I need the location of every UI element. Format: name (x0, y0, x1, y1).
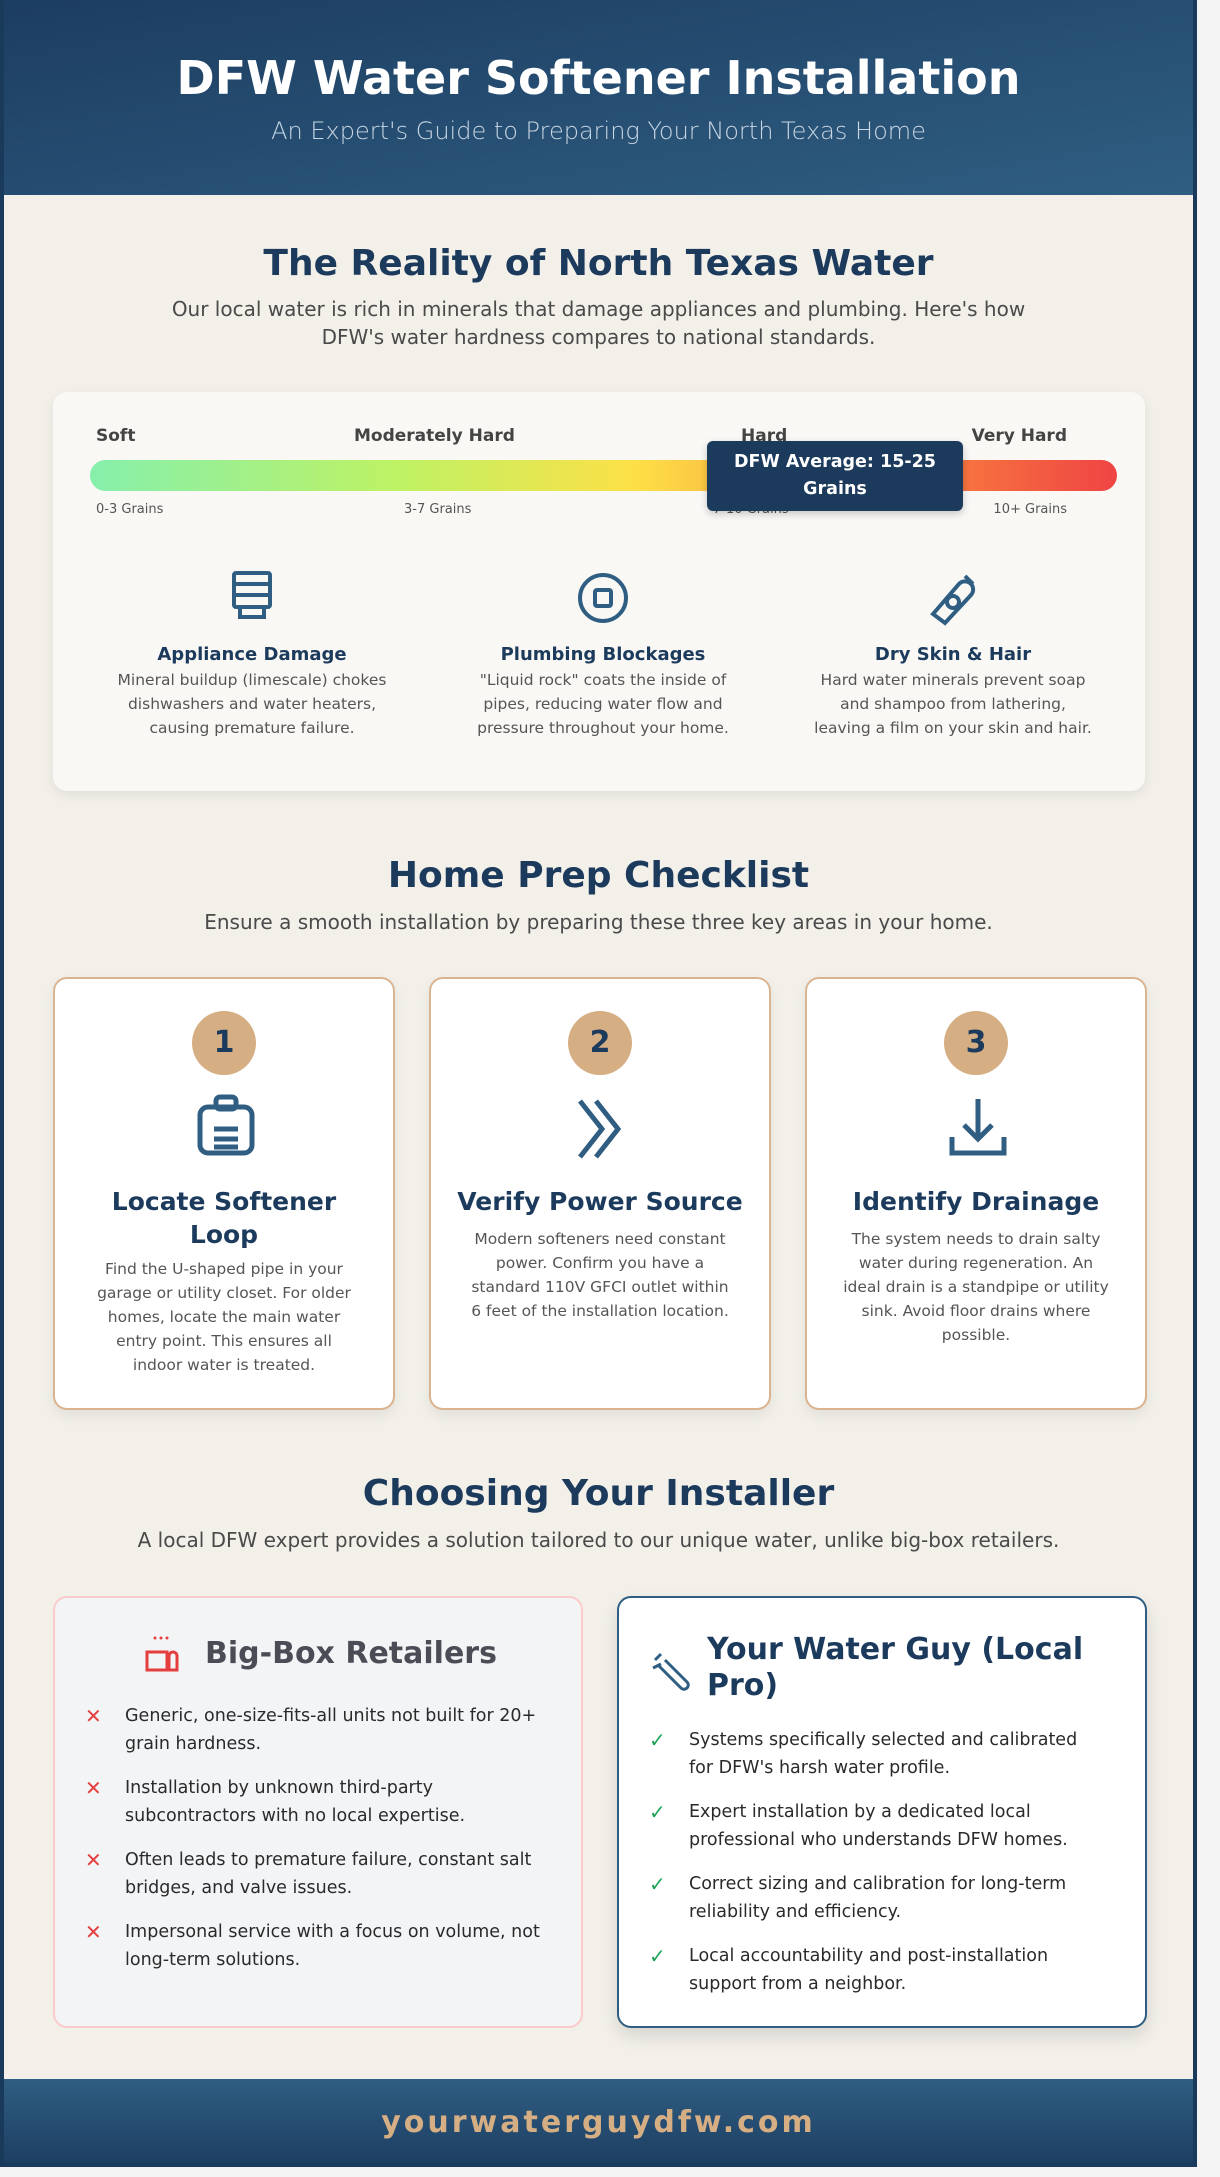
card: step 3: The system needs to drain salty water during regeneration. An ideal drain is a standpipe or utility sink. Avoid floor drains where possible. (843, 1230, 1109, 1344)
list: big-box cons: Installation by unknown third-party subcontractors with no local expertise. (125, 1778, 465, 1826)
footer: yourwaterguydfw.com (381, 2105, 816, 2140)
subtitle: An Expert's Guide to Preparing Your North Texas Home (271, 117, 926, 145)
grain labels: 10+ Grains (993, 502, 1067, 517)
title: big-box: Big-Box Retailers (205, 1636, 497, 1671)
icon: chevrons (578, 1100, 622, 1158)
text: reality intro: Our local water is rich in minerals that damage appliances and plumbing. Here's how (172, 297, 1025, 321)
heading: installer: Choosing Your Installer (363, 1473, 834, 1514)
list: big-box cons: ✕ (85, 1848, 102, 1872)
panel: hardness card (53, 392, 1145, 791)
heading: reality: The Reality of North Texas Water (263, 243, 934, 284)
grain labels: 0-3 Grains (96, 502, 163, 517)
list: big-box cons: ✕ (85, 1704, 102, 1728)
callout: DFW average: Grains (803, 479, 867, 499)
badge 3: 3 (966, 1025, 986, 1060)
footer (4, 2079, 1193, 2167)
badge 1: 1 (214, 1025, 234, 1060)
title: local pro: Your Water Guy (Local Pro) (707, 1632, 1083, 1703)
callout: DFW average: DFW Average: 15-25 (734, 452, 936, 472)
card: step 1: Locate Softener (112, 1187, 336, 1216)
scale labels (96, 426, 1067, 446)
card: step 1: Find the U-shaped pipe in your garage or utility closet. For older homes, locate the main water entry point. This ensures all indoor water is treated. (97, 1260, 351, 1374)
card: step 3 (805, 977, 1147, 1410)
item: skin (814, 574, 1092, 737)
item: appliance damage: Mineral buildup (limescale) chokes dishwashers and water heaters, causing premature failure. (118, 671, 386, 737)
list: local pro benefits: Expert installation by a dedicated local professional who understands DFW homes. (689, 1802, 1068, 1850)
item: skin: Hard water minerals prevent soap and shampoo from lathering, leaving a film on your skin and hair. (814, 671, 1092, 737)
list: local pro benefits: Local accountability and post-installation support from a neighbor. (689, 1946, 1048, 1994)
icon: wrench (652, 1653, 690, 1691)
list: big-box cons: Often leads to premature failure, constant salt bridges, and valve issues. (125, 1850, 531, 1898)
list: big-box cons: ✕ (85, 1776, 102, 1800)
item: skin: Dry Skin & Hair (875, 644, 1031, 665)
scale labels: Very Hard (972, 426, 1067, 446)
icon: clipboard (198, 1094, 254, 1156)
gradient bar (90, 460, 1117, 491)
list: big-box cons: ✕ (85, 1920, 102, 1944)
badge 3 (944, 1011, 1008, 1075)
header (4, 0, 1193, 195)
card: step 2: Verify Power Source (457, 1187, 743, 1216)
list: big-box cons: Impersonal service with a focus on volume, not long-term solutions. (125, 1922, 540, 1970)
card: step 1: Loop (190, 1220, 258, 1249)
text: installer intro: A local DFW expert provides a solution tailored to our unique water, unlike big-box retailers. (138, 1528, 1059, 1552)
icon: pipe (578, 573, 628, 623)
list: big-box cons (85, 1704, 540, 1970)
text: checklist intro: Ensure a smooth installation by preparing these three key areas in your home. (204, 910, 993, 934)
item: appliance damage (118, 571, 386, 737)
item: plumbing (477, 573, 729, 737)
panel: local pro (617, 1596, 1147, 2028)
icon: bottle (930, 574, 976, 626)
list: big-box cons: Generic, one-size-fits-all units not built for 20+ grain hardness. (125, 1706, 536, 1754)
list: local pro benefits: Systems specifically selected and calibrated for DFW's harsh water profile. (689, 1730, 1077, 1778)
panel: big-box (53, 1596, 583, 2028)
card: step 1 (53, 977, 395, 1410)
text: reality intro (172, 297, 1025, 349)
item: plumbing: "Liquid rock" coats the inside of pipes, reducing water flow and pressure throughout your home. (477, 671, 729, 737)
scale labels: Moderately Hard (354, 426, 515, 446)
grain labels: 3-7 Grains (404, 502, 471, 517)
list: local pro benefits: Correct sizing and calibration for long-term reliability and efficiency. (689, 1874, 1066, 1922)
card: step 2 (429, 977, 771, 1410)
list: local pro benefits: ✓ (649, 1872, 666, 1896)
callout: DFW average (707, 441, 963, 511)
list: local pro benefits: ✓ (649, 1800, 666, 1824)
card: step 3: Identify Drainage (853, 1187, 1099, 1216)
scale labels: Soft (96, 426, 135, 446)
scale labels: Hard (741, 426, 787, 446)
icon: appliance (232, 571, 272, 619)
icon: store (146, 1636, 178, 1672)
list: local pro benefits: ✓ (649, 1728, 666, 1752)
badge 1 (192, 1011, 256, 1075)
title: DFW Water Softener Installation (177, 51, 1020, 105)
list: local pro benefits: ✓ (649, 1944, 666, 1968)
heading: checklist: Home Prep Checklist (388, 855, 809, 896)
list: local pro benefits (649, 1728, 1077, 1994)
item: appliance damage: Appliance Damage (157, 644, 347, 665)
badge 2 (568, 1011, 632, 1075)
grain labels (96, 502, 1067, 517)
grain labels: 7-10 Grains (713, 502, 789, 517)
badge 2: 2 (590, 1025, 610, 1060)
card: step 2: Modern softeners need constant power. Confirm you have a standard 110V GFCI outlet within 6 feet of the installation location. (471, 1230, 729, 1320)
icon: download (950, 1099, 1006, 1156)
item: plumbing: Plumbing Blockages (501, 644, 705, 665)
text: reality intro: DFW's water hardness compares to national standards. (322, 325, 875, 349)
